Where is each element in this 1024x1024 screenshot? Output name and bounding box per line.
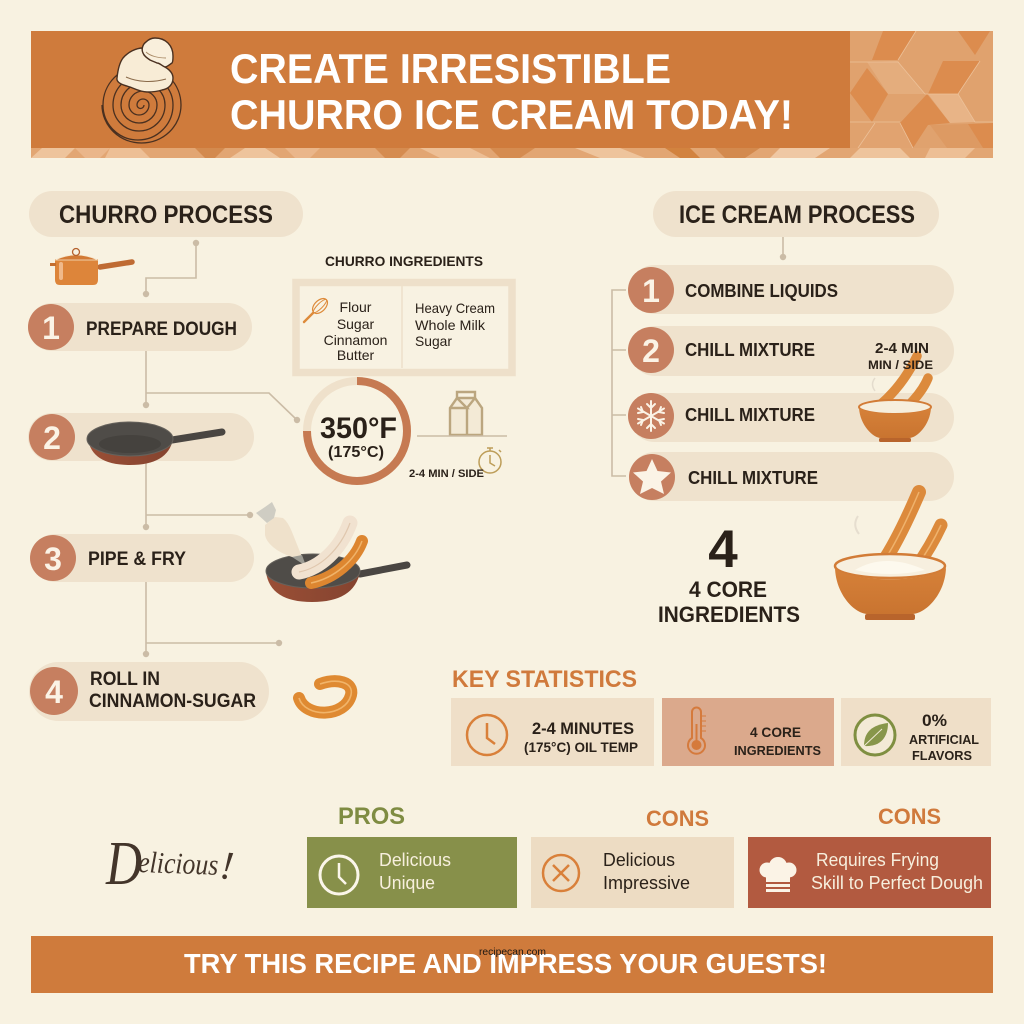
icon: white clock: [320, 856, 358, 894]
header banner: [31, 31, 993, 158]
heading: churro ingredients: CHURRO INGREDIENTS: [325, 253, 483, 269]
heading: pros: PROS: [338, 803, 405, 830]
ingredients table: Heavy Cream: [415, 300, 495, 316]
icon: star: [633, 459, 671, 494]
card: cons tan: Delicious: [603, 850, 675, 870]
ice cream step 2: 2: [642, 333, 660, 369]
ice cream step 4: [629, 452, 954, 501]
illustration: small bowl with churros: [859, 356, 931, 442]
card: cons red: Requires Frying: [816, 850, 939, 870]
stat card: ingredients: [662, 698, 834, 766]
title: [230, 45, 793, 138]
time overlay: 2-4 MIN: [875, 340, 929, 357]
icon: churro spiral with ice cream scoops: [102, 38, 181, 143]
card: cons red: Skill to Perfect Dough: [811, 873, 983, 893]
step 2 with frying pan: 2: [43, 420, 61, 456]
ingredients table: [296, 282, 512, 372]
time overlay: MIN / SIDE: [868, 358, 933, 372]
icon: saucepan: [50, 248, 132, 285]
connectors: ice cream flow: [612, 237, 786, 476]
header bottom strip: [31, 148, 993, 158]
step 3: PIPE & FRY: [88, 549, 186, 570]
ice cream step 2: CHILL MIXTURE: [685, 340, 815, 360]
panel: ice cream process: [612, 191, 954, 627]
title: CHURRO ICE CREAM TODAY!: [230, 91, 793, 138]
ingredients table: Sugar: [415, 333, 452, 349]
card: cons tan: Impressive: [603, 873, 690, 893]
watermark: recipecan.com: [479, 947, 546, 958]
temperature ring: (175°C): [328, 444, 384, 461]
icon: stopwatch: [479, 448, 501, 473]
illustration: large bowl with churros: [835, 492, 946, 620]
stat card: flavors: 0%: [922, 711, 947, 730]
stat: 4 core ingredients: 4 CORE: [689, 577, 767, 602]
card: cons red: [748, 837, 991, 908]
stat card: ingredients: 4 CORE: [750, 724, 801, 740]
step 4: [29, 662, 269, 721]
step 4: ROLL IN: [90, 669, 160, 690]
script note: delicious: !: [218, 842, 236, 888]
stat: 4 core ingredients: [658, 520, 800, 627]
icon: snowflake: [638, 401, 664, 431]
footer banner: TRY THIS RECIPE AND IMPRESS YOUR GUESTS!: [184, 948, 827, 979]
icon: whisk: [304, 296, 330, 322]
stat card: ingredients: INGREDIENTS: [734, 743, 821, 758]
step 4: CINNAMON-SUGAR: [89, 691, 256, 712]
step 1: PREPARE DOUGH: [86, 319, 237, 340]
title: CREATE IRRESISTIBLE: [230, 45, 671, 92]
stat card: flavors: FLAVORS: [912, 748, 972, 763]
heading: churro process: [29, 191, 303, 237]
step 2 with frying pan: [28, 413, 254, 465]
icon: frying pan: [87, 422, 222, 465]
ice cream step 2: [628, 326, 954, 376]
ingredients table: Flour: [340, 299, 372, 315]
ice cream step 1: 1: [642, 273, 660, 309]
panel: churro ingredients: [296, 253, 512, 481]
icon: thermometer: [688, 708, 706, 754]
stat: 4 core ingredients: INGREDIENTS: [658, 602, 800, 627]
script note: delicious: elicious: [138, 846, 219, 882]
ice cream step 3: [628, 393, 954, 442]
stat card: flavors: ARTIFICIAL: [909, 732, 979, 747]
heading: key statistics: KEY STATISTICS: [452, 666, 637, 693]
icon: curved churro: [299, 681, 351, 713]
illustration: piping bag over pan with churros: [256, 502, 407, 602]
ingredients table: Butter: [337, 347, 375, 363]
header geometric pattern: [850, 31, 993, 148]
icon: clock: [467, 715, 507, 755]
heading: cons 1: CONS: [646, 806, 709, 831]
footer banner: [31, 936, 993, 993]
heading: ice cream process: [653, 191, 939, 237]
stat: 4 core ingredients: 4: [708, 520, 738, 579]
shelf line: [417, 435, 507, 437]
time overlay: [868, 340, 933, 372]
heading: churro process: CHURRO PROCESS: [59, 201, 273, 229]
temperature ring: [307, 381, 407, 481]
card: pros: [307, 837, 517, 908]
ingredients table: Cinnamon: [324, 332, 387, 348]
card: cons tan: [531, 837, 734, 908]
heading: cons 2: CONS: [878, 804, 941, 829]
step 4: 4: [45, 674, 63, 710]
icon: milk carton: [450, 392, 482, 435]
ice cream step 1: COMBINE LIQUIDS: [685, 281, 838, 301]
stat card: time: [451, 698, 654, 766]
panel: churro process: [28, 191, 407, 721]
time label: 2-4 MIN / SIDE: [409, 468, 484, 480]
panel: pros and cons: [307, 803, 991, 908]
temperature ring: 350°F: [320, 412, 397, 445]
step 3: 3: [44, 541, 62, 577]
ice cream step 1: [628, 265, 954, 314]
heading: ice cream process: ICE CREAM PROCESS: [679, 201, 915, 229]
stat card: flavors: [841, 698, 991, 766]
ingredients table: Whole Milk: [415, 317, 486, 333]
stat card: time: (175°C) OIL TEMP: [524, 739, 638, 755]
connectors: churro flow: [143, 240, 300, 657]
stat card: time: 2-4 MINUTES: [532, 719, 634, 738]
ingredients table: Sugar: [337, 316, 375, 332]
step 1: [28, 303, 252, 351]
script note: delicious: [105, 830, 236, 898]
ice cream step 4: CHILL MIXTURE: [688, 468, 818, 488]
step 1: 1: [42, 310, 60, 346]
ice cream step 3: CHILL MIXTURE: [685, 405, 815, 425]
icon: chef hat: [760, 857, 796, 892]
icon: x in circle: [543, 855, 579, 891]
script note: delicious: D: [105, 830, 142, 898]
step 3: [30, 534, 254, 582]
panel: key statistics: [451, 666, 991, 766]
card: pros: Unique: [379, 873, 435, 893]
card: pros: Delicious: [379, 850, 451, 870]
icon: leaf badge: [855, 715, 895, 755]
